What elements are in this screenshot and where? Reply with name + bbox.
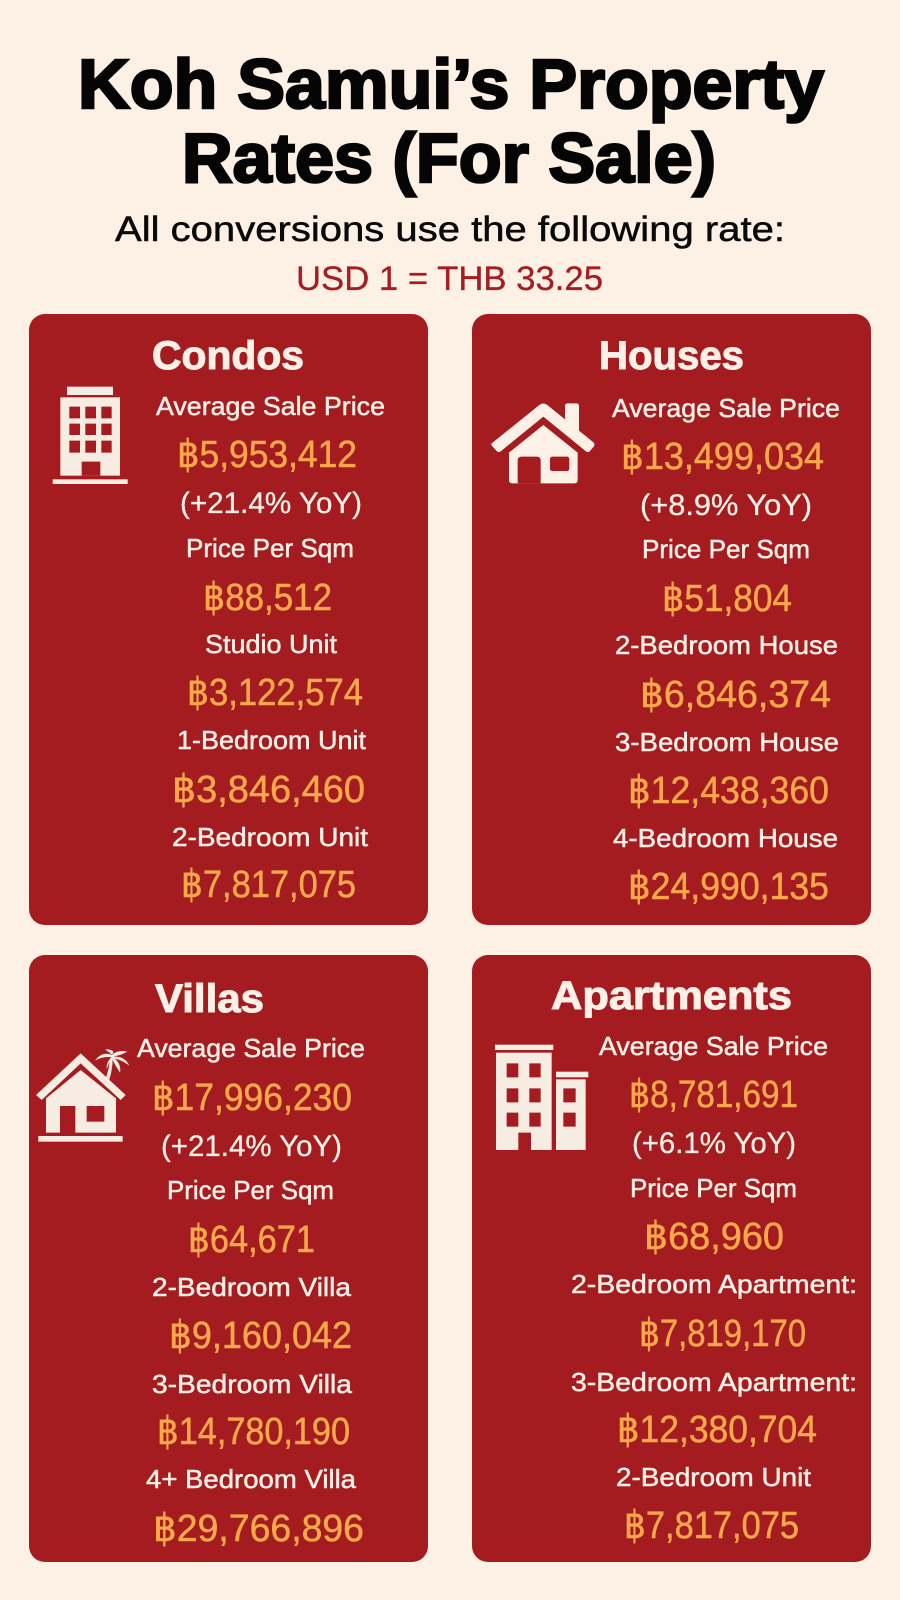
icon: house [491, 403, 594, 483]
price per sqm value: ฿88,512 [203, 577, 332, 619]
2-bedroom unit label: 2-Bedroom Unit [172, 822, 369, 852]
average sale price label: Average Sale Price [137, 1033, 365, 1063]
2-bedroom apartment label: 2-Bedroom Apartment: [571, 1269, 857, 1299]
subtitle: All conversions use the following rate: [115, 210, 785, 249]
3-bedroom villa label: 3-Bedroom Villa [152, 1369, 353, 1399]
panel: apartments [472, 955, 871, 1562]
heading: houses: Houses [599, 334, 744, 378]
average sale price label: Average Sale Price [599, 1031, 828, 1061]
3-bedroom apartment label: 3-Bedroom Apartment: [571, 1367, 857, 1397]
4-bedroom house label: 4-Bedroom House [613, 823, 838, 853]
panel: condos [29, 314, 428, 925]
average sale price label: Average Sale Price [156, 391, 385, 421]
icon: condo building [53, 387, 128, 484]
year on year change: (+8.9% YoY) [640, 489, 812, 522]
1-bedroom unit label: 1-Bedroom Unit [177, 725, 367, 755]
price per sqm label: Price Per Sqm [167, 1175, 334, 1205]
title [78, 45, 824, 197]
2-bedroom unit value: ฿7,817,075 [181, 864, 356, 906]
heading: villas: Villas [155, 977, 264, 1021]
average sale price value: ฿17,996,230 [152, 1077, 352, 1119]
year on year change: (+21.4% YoY) [180, 487, 362, 520]
heading: condos: Condos [152, 334, 304, 378]
2-bedroom unit label: 2-Bedroom Unit [616, 1462, 812, 1492]
4+ bedroom villa label: 4+ Bedroom Villa [146, 1464, 357, 1494]
average sale price label: Average Sale Price [612, 393, 840, 423]
3-bedroom villa value: ฿14,780,190 [157, 1411, 350, 1453]
average sale price value: ฿5,953,412 [177, 434, 357, 476]
price per sqm value: ฿51,804 [662, 578, 792, 620]
average sale price value: ฿8,781,691 [629, 1074, 798, 1116]
3-bedroom house label: 3-Bedroom House [615, 727, 839, 757]
2-bedroom villa value: ฿9,160,042 [169, 1315, 352, 1357]
studio unit label: Studio Unit [205, 629, 338, 659]
icon: villa with palm tree [36, 1049, 129, 1142]
4-bedroom house value: ฿24,990,135 [628, 866, 829, 908]
panel: houses [472, 314, 871, 925]
icon: apartment buildings [495, 1045, 588, 1150]
2-bedroom unit value: ฿7,817,075 [624, 1505, 799, 1547]
4+ bedroom villa value: ฿29,766,896 [153, 1508, 364, 1550]
2-bedroom villa label: 2-Bedroom Villa [152, 1272, 352, 1302]
price per sqm value: ฿68,960 [644, 1216, 784, 1258]
year on year change: (+6.1% YoY) [632, 1127, 796, 1160]
average sale price value: ฿13,499,034 [621, 436, 824, 478]
title: Koh Samui’s Property [78, 45, 824, 123]
1-bedroom unit value: ฿3,846,460 [172, 769, 365, 811]
panel: villas [29, 955, 428, 1562]
3-bedroom apartment value: ฿12,380,704 [617, 1409, 817, 1451]
heading: apartments: Apartments [551, 974, 792, 1018]
price per sqm label: Price Per Sqm [630, 1173, 797, 1203]
3-bedroom house value: ฿12,438,360 [628, 770, 829, 812]
price per sqm label: Price Per Sqm [642, 534, 810, 564]
title: Rates (For Sale) [182, 119, 716, 197]
price per sqm label: Price Per Sqm [186, 533, 354, 563]
2-bedroom house value: ฿6,846,374 [640, 674, 831, 716]
exchange rate: USD 1 = THB 33.25 [296, 260, 603, 298]
2-bedroom apartment value: ฿7,819,170 [639, 1313, 806, 1355]
2-bedroom house label: 2-Bedroom House [615, 630, 838, 660]
price per sqm value: ฿64,671 [188, 1219, 315, 1261]
year on year change: (+21.4% YoY) [161, 1130, 342, 1163]
studio unit value: ฿3,122,574 [187, 672, 363, 714]
